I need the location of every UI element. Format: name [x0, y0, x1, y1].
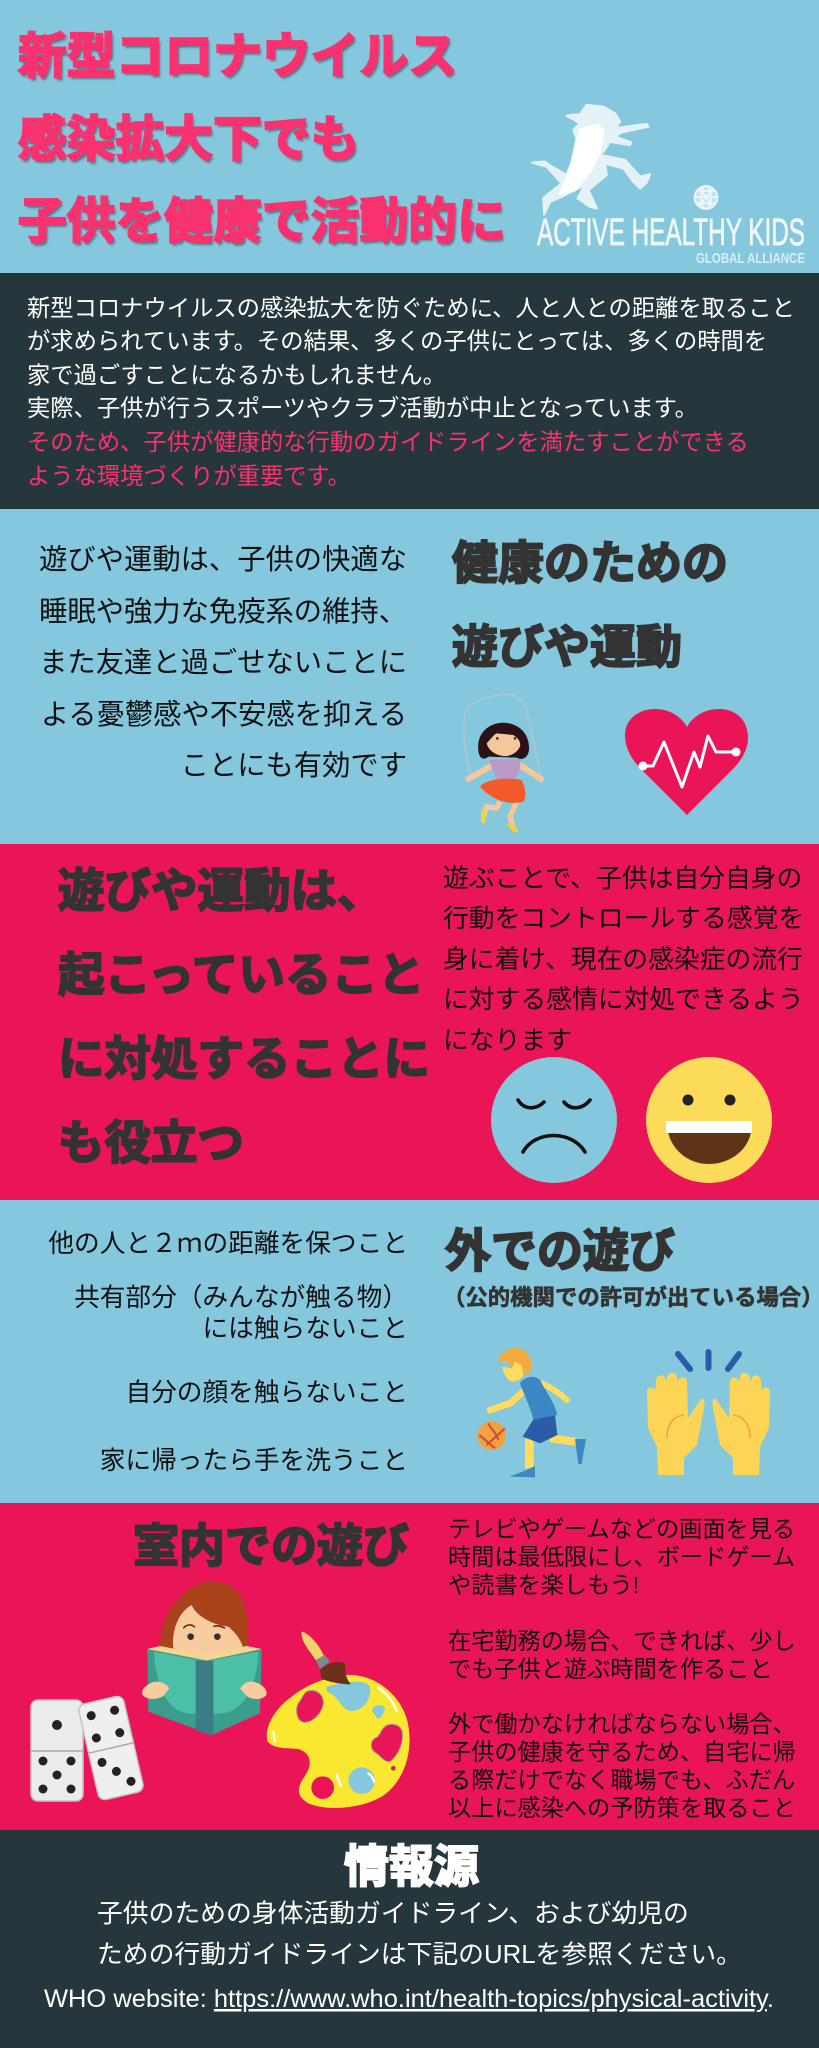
heading: 遊びや運動	[452, 621, 682, 673]
body text: 行動をコントロールする感覚を	[443, 905, 804, 933]
body text: に対する感情に対処できるよう	[443, 986, 804, 1014]
body text: ことにも有効です	[181, 749, 407, 781]
body text	[448, 1516, 796, 1821]
icon: globe	[694, 186, 718, 209]
body text: また友達と過ごせないことに	[39, 646, 407, 678]
panel: play helps cope	[0, 844, 819, 1200]
heading: 室内での遊び	[133, 1520, 409, 1572]
heading: 遊びや運動は、	[58, 865, 384, 917]
heading: 健康のための	[452, 537, 728, 589]
icon: sad face	[491, 1057, 617, 1183]
body text: 身に着け、現在の感染症の流行	[443, 946, 803, 974]
body text	[39, 543, 407, 781]
body text: 遊ぶことで、子供は自分自身の	[443, 865, 802, 893]
rule: shared items: には触らないこと	[202, 1315, 408, 1343]
body text: る際だけでなく職場でも、ふだん	[448, 1767, 795, 1793]
intro text: 新型コロナウイルスの感染拡大を防ぐために、人と人との距離を取ること	[27, 294, 795, 320]
body text: や読書を楽しもう!	[448, 1572, 639, 1598]
panel: indoor play	[0, 1503, 819, 1830]
panel: introduction	[0, 273, 819, 509]
title: 新型コロナウイルス	[18, 30, 457, 84]
body text: テレビやゲームなどの画面を見る	[448, 1516, 795, 1542]
source URL: WHO website: https://www.who.int/health-topics/physical-activity .	[44, 1985, 774, 2013]
icon: raised hands	[647, 1352, 770, 1475]
intro highlighted text	[27, 429, 749, 489]
rule: shared items	[74, 1284, 408, 1343]
title: 子供を健康で活動的に	[18, 195, 506, 249]
body text: 時間は最低限にし、ボードゲーム	[448, 1544, 795, 1570]
heading: 外での遊び	[445, 1225, 675, 1277]
icons	[463, 693, 748, 833]
icons	[491, 1057, 772, 1183]
heading: 情報源	[344, 1841, 479, 1892]
sub-heading: （公的機関での許可が出ている場合）	[443, 1285, 819, 1310]
rule: shared items: 共有部分（みんなが触る物）	[74, 1284, 408, 1312]
title: 感染拡大下でも	[18, 112, 360, 166]
illustrations	[30, 1582, 410, 1808]
intro text: が求められています。その結果、多くの子供にとっては、多くの時間を	[27, 328, 767, 354]
title	[17, 30, 506, 249]
heading	[451, 537, 728, 673]
intro text: 家で過ごすことになるかもしれません。	[27, 362, 446, 388]
icon: girl skipping rope	[464, 694, 541, 830]
body text: 遊びや運動は、子供の快適な	[39, 543, 407, 575]
heading: に対処することに	[58, 1033, 430, 1085]
intro text: 実際、子供が行うスポーツやクラブ活動が中止となっています。	[27, 395, 698, 421]
body text: 以上に感染への予防策を取ること	[448, 1795, 796, 1821]
source text: ための行動ガイドラインは下記のURLを参照ください。	[97, 1941, 742, 1969]
intro highlighted text: そのため、子供が健康的な行動のガイドラインを満たすことができる	[27, 429, 749, 455]
panel: header	[0, 0, 819, 273]
icons	[477, 1348, 770, 1478]
heading: 起こっていること	[58, 949, 424, 1001]
rules list	[48, 1230, 408, 1475]
icon: boy dribbling	[477, 1348, 586, 1477]
rule: wash hands: 家に帰ったら手を洗うこと	[100, 1447, 408, 1475]
panel: outdoor play	[0, 1200, 819, 1503]
heading: も役立つ	[58, 1117, 244, 1169]
intro highlighted text: ような環境づくりが重要です。	[27, 463, 351, 489]
body text: よる憂鬱感や不安感を抑える	[41, 698, 407, 730]
icon: dominoes	[31, 1695, 144, 1801]
rule: distance: 他の人と２ｍの距離を保つこと	[48, 1230, 408, 1258]
intro text	[27, 294, 795, 421]
body text: 子供の健康を守るため、自宅に帰	[448, 1739, 796, 1765]
logo: Active Healthy Kids	[531, 104, 805, 267]
icon: happy face	[646, 1057, 772, 1183]
panel: sources	[0, 1830, 819, 2048]
body text: 睡眠や強力な免疫系の維持、	[39, 594, 407, 626]
icon: child reading a book	[142, 1582, 267, 1735]
body text: 外で働かなければならない場合、	[448, 1711, 796, 1737]
body text: になります	[443, 1027, 572, 1055]
body text: 在宅勤務の場合、できれば、少し	[448, 1628, 796, 1654]
body text: でも子供と遊ぶ時間を作ること	[448, 1656, 773, 1682]
heading	[57, 865, 430, 1169]
body text	[443, 865, 804, 1055]
icon: paint palette and brush	[267, 1632, 410, 1808]
icon: running figures	[532, 105, 650, 214]
source text: 子供のための身体活動ガイドライン、および幼児の	[97, 1900, 689, 1928]
source text	[97, 1900, 742, 1969]
icon: heart with pulse	[625, 709, 748, 815]
panel: play and exercise for health	[0, 509, 819, 844]
rule: face: 自分の顔を触らないこと	[125, 1379, 408, 1407]
